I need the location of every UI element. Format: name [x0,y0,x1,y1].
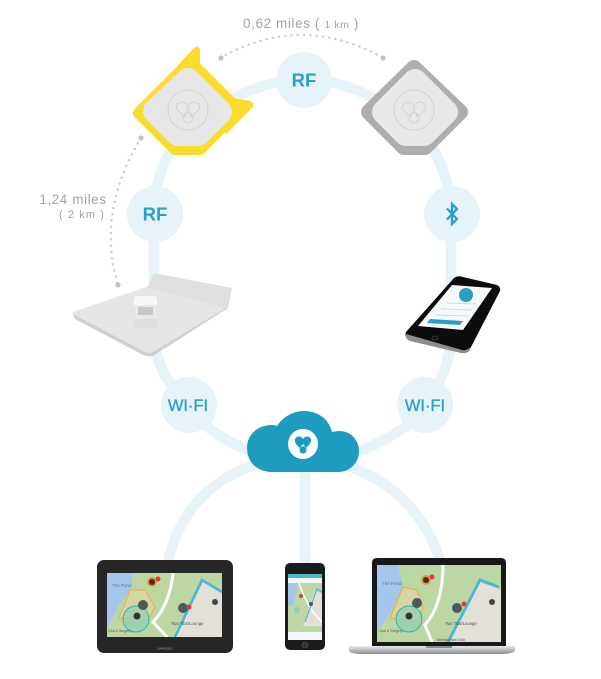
laptop map: The Pond [382,581,402,586]
distance: 1.24 miles [39,135,144,288]
tablet [97,560,233,653]
badge: WI-FI right: WI·FI [405,397,445,415]
device: yellow tracker [139,47,254,149]
distance: 1.24 miles: ( 2 km ) [59,209,105,221]
tablet: SAMSUNG [157,646,173,650]
tablet map [107,573,222,637]
device: smartphone [406,276,500,353]
logo: yellow tracker [168,90,208,130]
phone [285,563,325,650]
module on base [134,296,157,328]
phone map [288,574,322,640]
badge: WI-FI right [397,377,453,433]
laptop map: Metropolitan Club [437,638,465,642]
app screen content [427,288,476,325]
badge: Bluetooth [424,186,480,242]
badge: WI-FI left [161,377,217,433]
distance: 0.62 miles: 0,62 miles ( 1 km ) [243,16,359,31]
logo: cloud [295,437,311,454]
infographic: device network diagram [40,18,515,654]
cloud [247,411,359,472]
distance: 1.24 miles: 1,24 miles [39,192,107,207]
laptop [349,558,515,654]
badge: RF top [276,52,332,108]
distance: 0.62 miles [218,16,386,61]
laptop map [377,565,501,642]
connection lines [154,79,451,563]
device: base station [73,273,232,356]
badge: RF left [127,186,183,242]
badge: RF left: RF [143,204,167,224]
tablet map: Two Tibs/Lounge [171,621,204,626]
laptop map: Two Tibs/Lounge [445,621,477,626]
tablet map: Oral & Surgery [108,629,131,633]
logo: grey tracker [394,90,434,130]
badge: RF top: RF [292,70,316,90]
laptop map: Oral & Surgery [379,629,403,633]
device: grey tracker [369,68,460,147]
badge: WI-FI left: WI·FI [168,397,208,415]
tablet map: The Pond [112,583,132,588]
